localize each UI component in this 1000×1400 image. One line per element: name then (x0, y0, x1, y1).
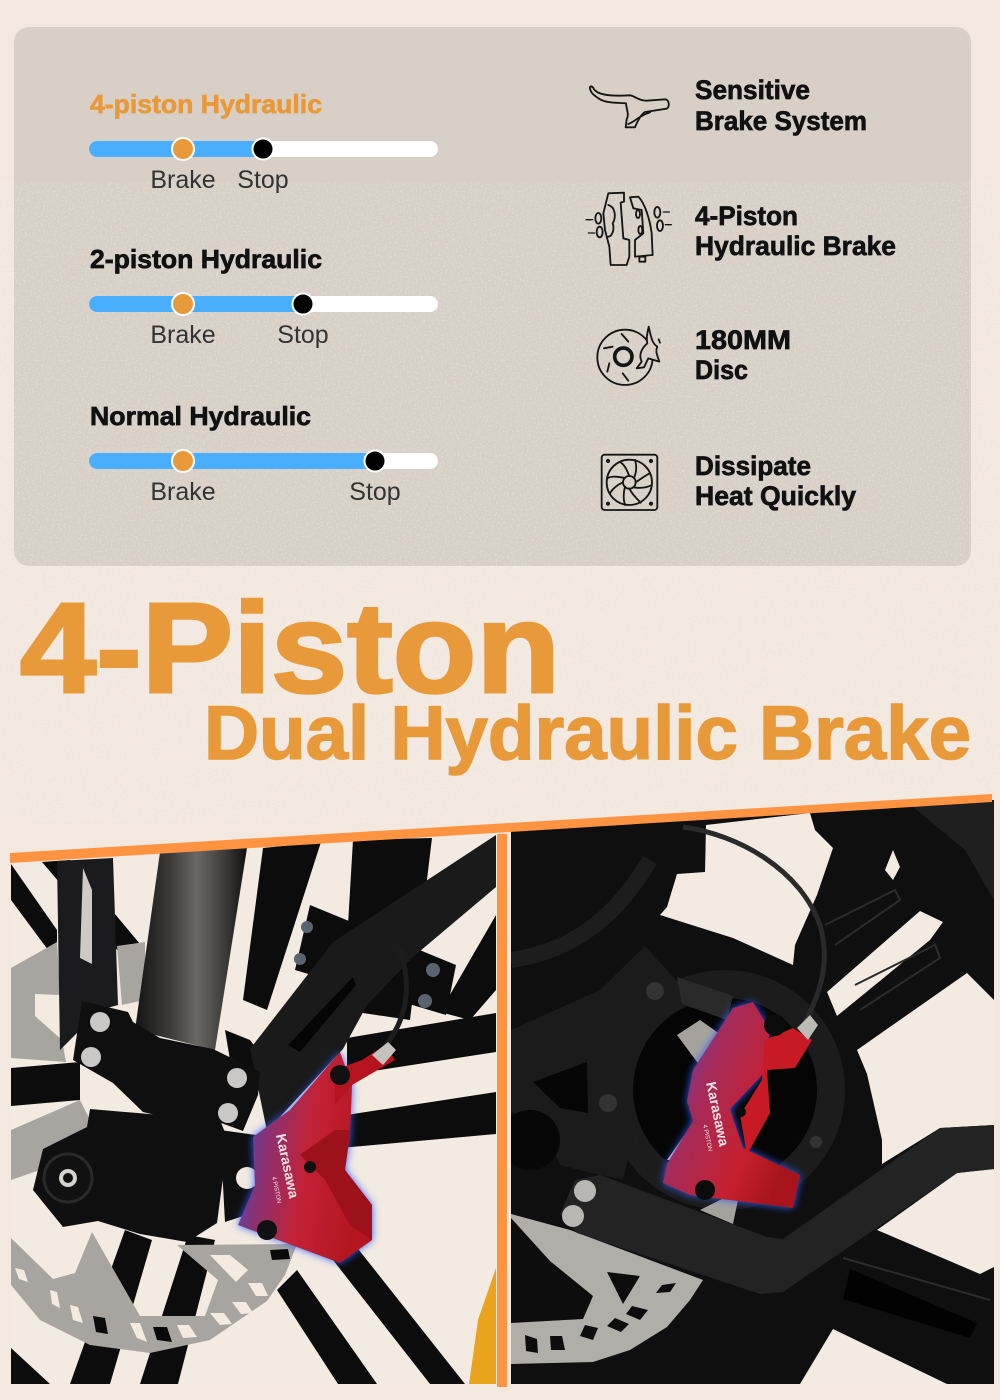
rear caliper (663, 1002, 818, 1208)
cream window: right (857, 973, 994, 1164)
rear tyre (914, 800, 994, 900)
front hose (382, 950, 406, 1050)
rear caliper: 4 PISTON (701, 1124, 713, 1152)
comparison: 2-piston hydraulic: Brake (150, 321, 216, 349)
comparison: 4-piston hydraulic: Brake (150, 166, 216, 194)
feature: dissipate heat quickly: Heat Quickly (695, 481, 856, 511)
title: 4-Piston: 4-Piston (20, 577, 560, 720)
feature: 180mm disc: 180MM (695, 325, 791, 355)
front axle (44, 1154, 92, 1202)
control panel (0, 27, 1000, 822)
rear hub ring (605, 970, 845, 1210)
photo: front wheel caliper (11, 830, 496, 1384)
reflector (469, 1268, 496, 1384)
rear hub shading (633, 998, 817, 1182)
comparison: 2-piston hydraulic: Stop (277, 321, 329, 349)
silver disc pieces (667, 1020, 740, 1224)
spoke grooves (825, 890, 990, 1300)
rear slot (533, 1062, 588, 1113)
rear frame tube highlight (511, 860, 650, 960)
feature: 4-piston hydraulic brake: 4-Piston (695, 201, 798, 231)
comparison: 4-piston hydraulic: 4-piston Hydraulic (90, 89, 322, 119)
comparison: 4-piston hydraulic (89, 89, 438, 194)
front brake disc (11, 942, 297, 1353)
subtitle: Dual Hydraulic Brake: Dual Hydraulic Brake (204, 691, 971, 776)
rear plate (511, 946, 677, 1179)
axle cap (511, 1110, 560, 1170)
fender arm (250, 835, 496, 1131)
lower spoke slot (843, 1269, 977, 1338)
rear chain guard (560, 1125, 994, 1294)
feature: 4-piston hydraulic brake (586, 193, 896, 265)
cream window: small (885, 850, 900, 880)
caliper bracket (677, 977, 733, 1020)
feature: 180mm disc (597, 325, 791, 385)
front bolts (81, 921, 440, 1123)
orange top rule (10, 794, 992, 863)
rear hose (683, 827, 824, 1022)
cream window: upper (660, 813, 833, 965)
front caliper: Karasawa (273, 1132, 302, 1200)
cream window: below guard (877, 1169, 994, 1274)
comparison: 4-piston hydraulic: Stop (237, 166, 289, 194)
feature: 180mm disc: Disc (695, 355, 748, 385)
feature: dissipate heat quickly: Dissipate (695, 451, 811, 481)
comparison: normal hydraulic (89, 401, 438, 506)
rear brake disc (511, 1214, 703, 1364)
hub window (236, 1167, 255, 1189)
feature: sensitive brake system: Sensitive (695, 75, 810, 105)
fork clamp and leg (33, 1001, 262, 1242)
cream window: between spokes (827, 911, 943, 1016)
comparison: normal hydraulic: Normal Hydraulic (90, 401, 311, 431)
feature: 4-piston hydraulic brake: Hydraulic Brake (695, 231, 896, 261)
comparison: normal hydraulic: Brake (150, 478, 216, 506)
feature: sensitive brake system (590, 75, 867, 136)
rear caliper: Karasawa (703, 1080, 732, 1148)
orange divider (497, 834, 507, 1387)
cream window: bottom (800, 1329, 947, 1384)
rear bolts (562, 982, 822, 1227)
comparison: normal hydraulic: Stop (349, 478, 401, 506)
feature: sensitive brake system: Brake System (695, 106, 867, 136)
front wheel spokes (11, 838, 496, 1384)
front caliper (238, 1042, 396, 1263)
front caliper: 4 PISTON (270, 1176, 282, 1204)
feature: dissipate heat quickly (602, 451, 856, 511)
photo: rear wheel caliper (500, 800, 994, 1384)
comparison: 2-piston hydraulic: 2-piston Hydraulic (90, 244, 322, 274)
comparison: 2-piston hydraulic (89, 244, 438, 349)
fork tube (135, 848, 247, 1050)
fender strut (57, 858, 118, 1050)
